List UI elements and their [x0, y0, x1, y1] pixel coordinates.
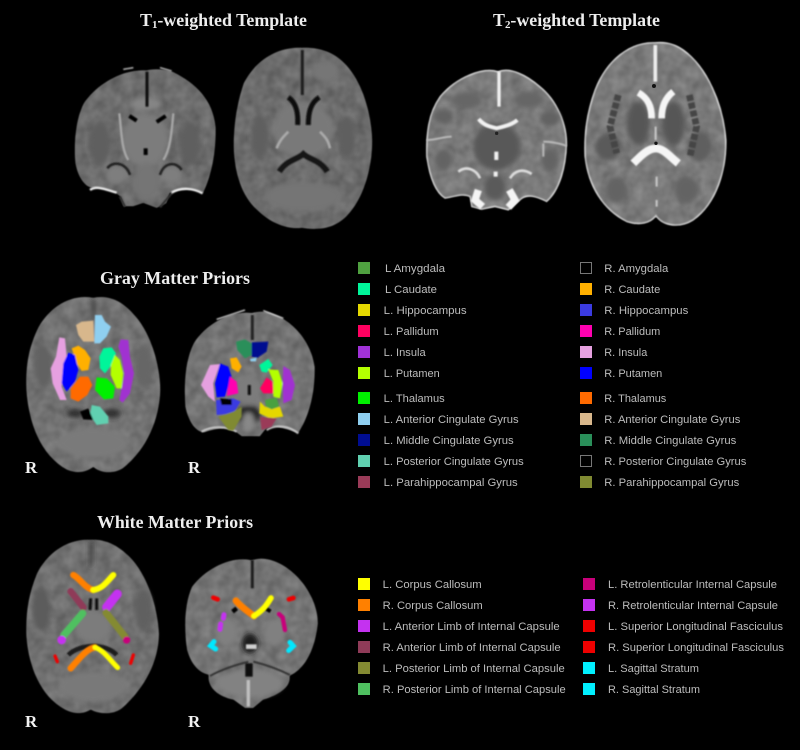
legend: white matter tracts: L. Retrolenticular Internal Capsule	[608, 579, 777, 591]
heading: T1-weighted template: 1	[152, 19, 157, 31]
legend: gray matter regions: L Caudate	[385, 284, 437, 296]
legend: gray matter regions: R. Parahippocampal Gyrus	[604, 477, 740, 489]
legend: white matter tracts: R. Anterior Limb of Internal Capsule	[383, 642, 561, 654]
heading: T2-weighted template: -weighted Template	[510, 10, 660, 30]
legend: gray matter regions: R. Anterior Cingulate Gyrus	[604, 414, 741, 426]
brain: T2 coronal slice	[427, 70, 567, 210]
heading: T2-weighted template: T	[493, 10, 505, 30]
brain: T1 axial slice	[233, 47, 373, 229]
legend: white matter tracts: L. Anterior Limb of Internal Capsule	[383, 621, 560, 633]
legend: gray matter regions: R. Hippocampus	[604, 305, 689, 317]
brain: T2 axial slice	[585, 42, 726, 225]
legend: gray matter regions	[358, 262, 747, 489]
legend: gray matter regions: R. Caudate	[604, 284, 660, 296]
legend: gray matter regions: L Amygdala	[385, 263, 446, 275]
brain: white matter coronal slice with colored tracts	[185, 558, 318, 708]
label: R, white axial: R	[25, 712, 38, 731]
legend: gray matter regions: R. Posterior Cingulate Gyrus	[604, 456, 747, 468]
legend: white matter tracts: R. Retrolenticular Internal Capsule	[608, 600, 778, 612]
legend: gray matter regions: L. Parahippocampal Gyrus	[384, 477, 518, 489]
heading: T1-weighted template: T	[140, 10, 152, 30]
legend: white matter tracts: L. Corpus Callosum	[383, 579, 482, 591]
legend: gray matter regions: R. Amygdala	[604, 263, 669, 275]
legend: white matter tracts: R. Superior Longitudinal Fasciculus	[608, 642, 784, 654]
legend: white matter tracts: R. Corpus Callosum	[383, 600, 483, 612]
legend: white matter tracts	[358, 578, 784, 696]
legend: gray matter regions: R. Insula	[604, 347, 648, 359]
legend: white matter tracts: L. Posterior Limb of Internal Capsule	[383, 663, 565, 675]
legend: gray matter regions: L. Posterior Cingulate Gyrus	[384, 456, 524, 468]
panel: gray matter priors	[25, 268, 315, 477]
legend: gray matter regions: L. Putamen	[384, 368, 440, 380]
legend: gray matter regions: L. Insula	[384, 347, 427, 359]
panel: white matter priors	[25, 512, 318, 731]
label: R, gray axial: R	[25, 458, 38, 477]
brain: gray matter axial slice with colored regions	[26, 297, 161, 473]
brain: white matter axial slice with colored tracts	[26, 539, 159, 714]
legend: white matter tracts: L. Sagittal Stratum	[608, 663, 699, 675]
panel: T1-weighted template	[74, 10, 373, 229]
legend: gray matter regions: L. Thalamus	[384, 393, 445, 405]
heading: gray matter priors: Gray Matter Priors	[100, 268, 250, 288]
legend: gray matter regions: R. Middle Cingulate Gyrus	[604, 435, 737, 447]
legend: gray matter regions: L. Hippocampus	[384, 305, 467, 317]
legend: gray matter regions: L. Middle Cingulate Gyrus	[384, 435, 514, 447]
legend: white matter tracts: R. Posterior Limb of Internal Capsule	[383, 684, 566, 696]
heading: T2-weighted template: 2	[505, 19, 511, 31]
legend: gray matter regions: R. Thalamus	[604, 393, 667, 405]
legend: white matter tracts: L. Superior Longitudinal Fasciculus	[608, 621, 784, 633]
legend: gray matter regions: R. Pallidum	[604, 326, 660, 338]
legend: gray matter regions: L. Anterior Cingulate Gyrus	[384, 414, 519, 426]
legend: gray matter regions: L. Pallidum	[384, 326, 439, 338]
heading: white matter priors: White Matter Priors	[97, 512, 253, 532]
label: R, white coronal: R	[188, 712, 201, 731]
brain: gray matter coronal slice with colored regions	[184, 310, 315, 437]
heading: T1-weighted template: -weighted Template	[157, 10, 307, 30]
legend: gray matter regions: R. Putamen	[604, 368, 662, 380]
legend: white matter tracts: R. Sagittal Stratum	[608, 684, 700, 696]
brain: T1 coronal slice	[74, 68, 216, 208]
label: R, gray coronal: R	[188, 458, 201, 477]
panel: T2-weighted template	[427, 10, 726, 225]
